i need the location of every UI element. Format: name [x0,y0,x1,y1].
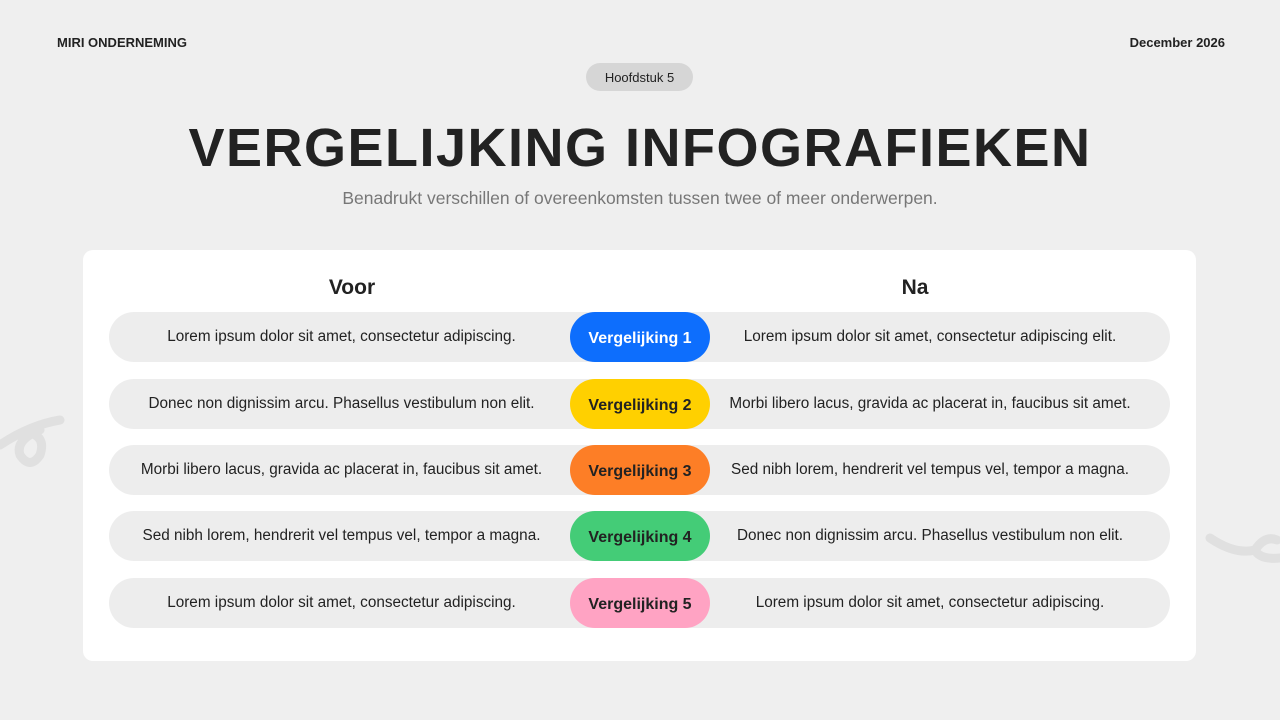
row 4 [109,511,1170,561]
row 1: Vergelijking 1 [588,330,692,346]
title: VERGELIJKING INFOGRAFIEKEN [188,118,1092,178]
row 2: Donec non dignissim arcu. Phasellus vestibulum non elit. [148,395,535,412]
date label: December 2026 [1130,35,1225,50]
decorative squiggle left [0,416,64,467]
row 5: Lorem ipsum dolor sit amet, consectetur adipiscing. [756,594,1104,611]
row 2 [109,379,1170,429]
header: Voor: Voor [329,276,375,299]
row 3: Morbi libero lacus, gravida ac placerat in, faucibus sit amet. [141,461,542,478]
row 5: Lorem ipsum dolor sit amet, consectetur adipiscing. [167,594,516,611]
decorative squiggle right [1206,534,1280,563]
row 3: Sed nibh lorem, hendrerit vel tempus vel, tempor a magna. [731,461,1129,478]
row 2: Morbi libero lacus, gravida ac placerat in, faucibus sit amet. [729,395,1131,412]
row 3: Vergelijking 3 [588,462,692,480]
row 4: Sed nibh lorem, hendrerit vel tempus vel, tempor a magna. [143,527,540,544]
header: Na: Na [902,276,928,299]
panel: comparison table [83,250,1196,661]
row 3 [109,445,1170,495]
row 1: Lorem ipsum dolor sit amet, consectetur adipiscing. [167,328,516,345]
row 4: Donec non dignissim arcu. Phasellus vestibulum non elit. [737,527,1123,544]
chapter tag: Hoofdstuk 5 [605,70,674,84]
row 1 [109,312,1170,362]
subtitle: Benadrukt verschillen of overeenkomsten tussen twee of meer onderwerpen. [342,188,938,208]
row 2: Vergelijking 2 [588,396,692,414]
company label: MIRI ONDERNEMING [57,35,187,50]
chapter tag [586,63,693,91]
row 4: Vergelijking 4 [588,528,692,546]
row 5 [109,578,1170,628]
row 1: Lorem ipsum dolor sit amet, consectetur adipiscing elit. [744,328,1116,345]
row 5: Vergelijking 5 [588,596,692,612]
